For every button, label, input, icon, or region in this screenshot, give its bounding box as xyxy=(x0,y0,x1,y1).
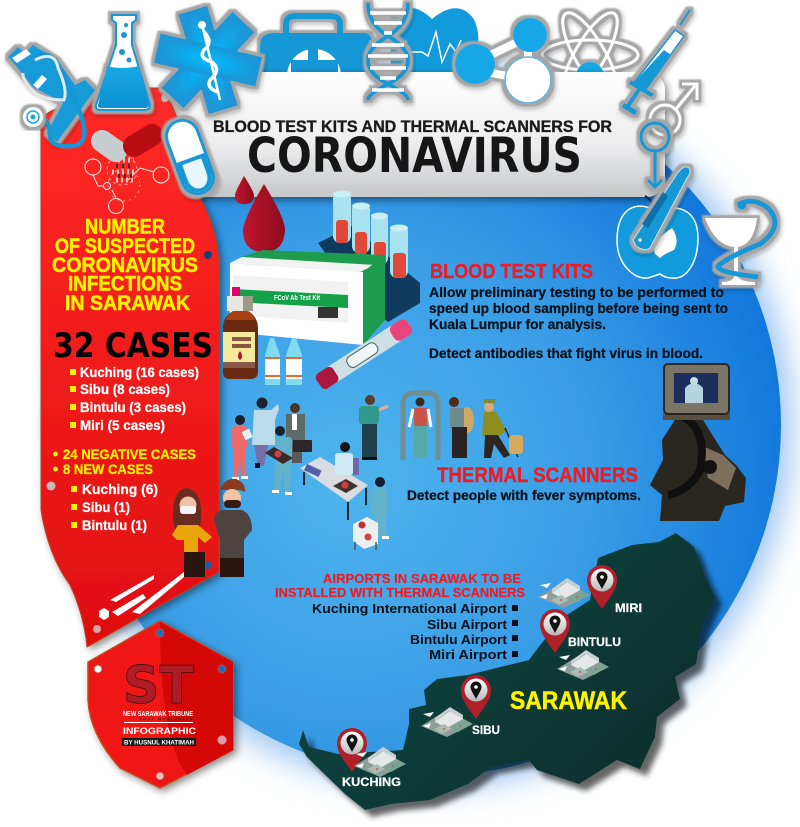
list: cases by town: Kuching (16 cases) xyxy=(80,365,199,380)
list: cases by town: Miri (5 cases) xyxy=(80,418,165,433)
tag holes xyxy=(46,94,212,633)
box side xyxy=(363,255,385,345)
airport security illustration xyxy=(359,393,523,460)
airport list: Miri Airport xyxy=(429,647,508,662)
icon: medical cross with stethoscope xyxy=(8,45,95,146)
box front xyxy=(230,263,363,345)
Kuching airport and pin xyxy=(337,728,406,777)
list: new cases by town xyxy=(71,482,158,533)
icon: blue and white capsule xyxy=(162,116,218,198)
icon: male symbol xyxy=(650,84,697,135)
traveller with luggage xyxy=(482,399,523,458)
panel: red suspected cases tag xyxy=(41,88,219,647)
map: Sarawak xyxy=(299,533,715,810)
icon: red and grey capsule xyxy=(102,135,152,151)
thermal scanners heading: THERMAL SCANNERS xyxy=(437,464,638,487)
nurse in pink xyxy=(232,415,253,480)
list: cases by town xyxy=(70,365,199,433)
panel: logo badge xyxy=(88,621,233,788)
logo holes xyxy=(94,629,226,780)
list: negative and new cases xyxy=(53,447,196,477)
airports heading: AIRPORTS IN SARAWAK TO BE xyxy=(323,571,521,586)
airports heading xyxy=(275,571,525,600)
cross highlights xyxy=(12,49,47,89)
list: cases by town: Sibu (8 cases) xyxy=(80,382,170,397)
icon: medicine bottle xyxy=(223,296,258,379)
heading: number of suspected infections xyxy=(52,216,198,315)
heading: number of suspected infections: NUMBER xyxy=(85,216,165,238)
airport list: Bintulu Airport xyxy=(410,632,508,647)
stethoscope tubes xyxy=(23,54,84,146)
icon: blood drops xyxy=(235,176,285,252)
logo name: NEW SARAWAK TRIBUNE xyxy=(123,709,193,718)
icon: thermometer xyxy=(633,167,690,250)
icon: molecule xyxy=(455,18,551,103)
icon: syringe xyxy=(623,10,690,113)
white stripes xyxy=(99,572,190,620)
traveller with backpack xyxy=(449,397,474,458)
logo subtitle: INFOGRAPHIC xyxy=(123,726,197,736)
map town labels: BINTULU xyxy=(568,637,621,649)
icon: apple xyxy=(617,192,698,278)
blood test kits description: Detect antibodies that fight virus in blood. xyxy=(429,346,703,361)
list: negative and new cases: 8 NEW CASES xyxy=(63,462,153,477)
icon: female symbol xyxy=(641,123,669,187)
list: new cases by town: Sibu (1) xyxy=(82,500,130,515)
thermal scanners description: Detect people with fever symptoms. xyxy=(407,488,641,503)
nurse with cart xyxy=(353,477,389,550)
icon: DNA helix xyxy=(368,3,408,100)
icon: test stick xyxy=(314,317,414,391)
logo letters: ST xyxy=(123,656,195,716)
heading: number of suspected infections: OF SUSPECTED xyxy=(55,235,195,258)
blood test kits description: speed up blood sampling before being sent to xyxy=(429,301,728,316)
icon: star of life xyxy=(143,0,273,125)
Sibu airport and pin xyxy=(421,675,491,737)
title line one: BLOOD TEST KITS AND THERMAL SCANNERS FOR xyxy=(213,117,612,136)
Bintulu airport and pin xyxy=(540,609,609,680)
list: negative and new cases: 24 NEGATIVE CASES xyxy=(63,447,196,462)
kit label: FCoV Ab Test Kit xyxy=(274,295,321,302)
seated doctor xyxy=(335,442,359,475)
airport list: Sibu Airport xyxy=(427,617,508,632)
title line two: CORONAVIRUS xyxy=(247,128,582,184)
list: new cases by town: Bintulu (1) xyxy=(82,518,147,533)
icon: heart with pulse xyxy=(390,7,479,76)
heading: number of suspected infections: IN SARAWAK xyxy=(65,292,190,315)
icon: medical kit xyxy=(260,16,372,76)
icon: bowl of hygieia xyxy=(705,200,775,285)
map town labels: KUCHING xyxy=(342,777,401,789)
scanner gate xyxy=(403,393,438,460)
box lid xyxy=(230,257,375,272)
blue circle background xyxy=(79,74,781,776)
blood test kits description: Allow preliminary testing to be performed to xyxy=(429,285,724,300)
logo tagline: Your New Voice xyxy=(139,716,193,721)
logo credit xyxy=(122,738,196,746)
icon: masked woman xyxy=(172,488,212,577)
total cases: 32 CASES xyxy=(53,326,213,366)
list: new cases by town: Kuching (6) xyxy=(82,482,158,497)
map town labels: SIBU xyxy=(472,725,500,737)
airports heading: INSTALLED WITH THERMAL SCANNERS xyxy=(275,585,525,600)
box top green xyxy=(242,250,385,272)
test kit box xyxy=(230,250,385,345)
heading: number of suspected infections: CORONAVIRUS xyxy=(52,254,198,277)
airport list xyxy=(312,601,518,662)
map town labels xyxy=(342,603,642,789)
blood test kits heading: BLOOD TEST KITS xyxy=(430,261,593,283)
panel: title banner xyxy=(170,72,665,197)
airport list: Kuching International Airport xyxy=(312,601,508,616)
nurse with tray xyxy=(265,426,293,495)
blue cross xyxy=(8,45,95,142)
list: cases by town: Bintulu (3 cases) xyxy=(80,400,186,415)
icon: virus network xyxy=(85,155,169,214)
icon: masked man xyxy=(214,479,252,577)
doctor xyxy=(252,398,279,468)
medical staff illustration xyxy=(232,398,389,550)
heading: number of suspected infections: INFECTIONS xyxy=(68,272,182,296)
icon: atom xyxy=(542,6,638,104)
icon: thermal camera xyxy=(650,363,746,521)
map label: Sarawak: SARAWAK xyxy=(510,687,627,715)
icon: vials xyxy=(265,338,302,385)
map town labels: MIRI xyxy=(615,603,642,615)
blood test kits description xyxy=(429,285,728,361)
security guard xyxy=(359,395,388,460)
icon: test tube rack xyxy=(318,190,420,322)
blood test kits description: Kuala Lumpur for analysis. xyxy=(429,317,606,332)
icon: flask xyxy=(96,15,150,110)
table with samples xyxy=(300,457,368,520)
blue circle glow xyxy=(68,63,792,787)
chest piece xyxy=(23,107,43,127)
man in suit with bag xyxy=(286,403,312,463)
Miri airport and pin xyxy=(538,565,617,609)
logo credit: BY HUSNUL KHATIMAH xyxy=(124,740,194,746)
